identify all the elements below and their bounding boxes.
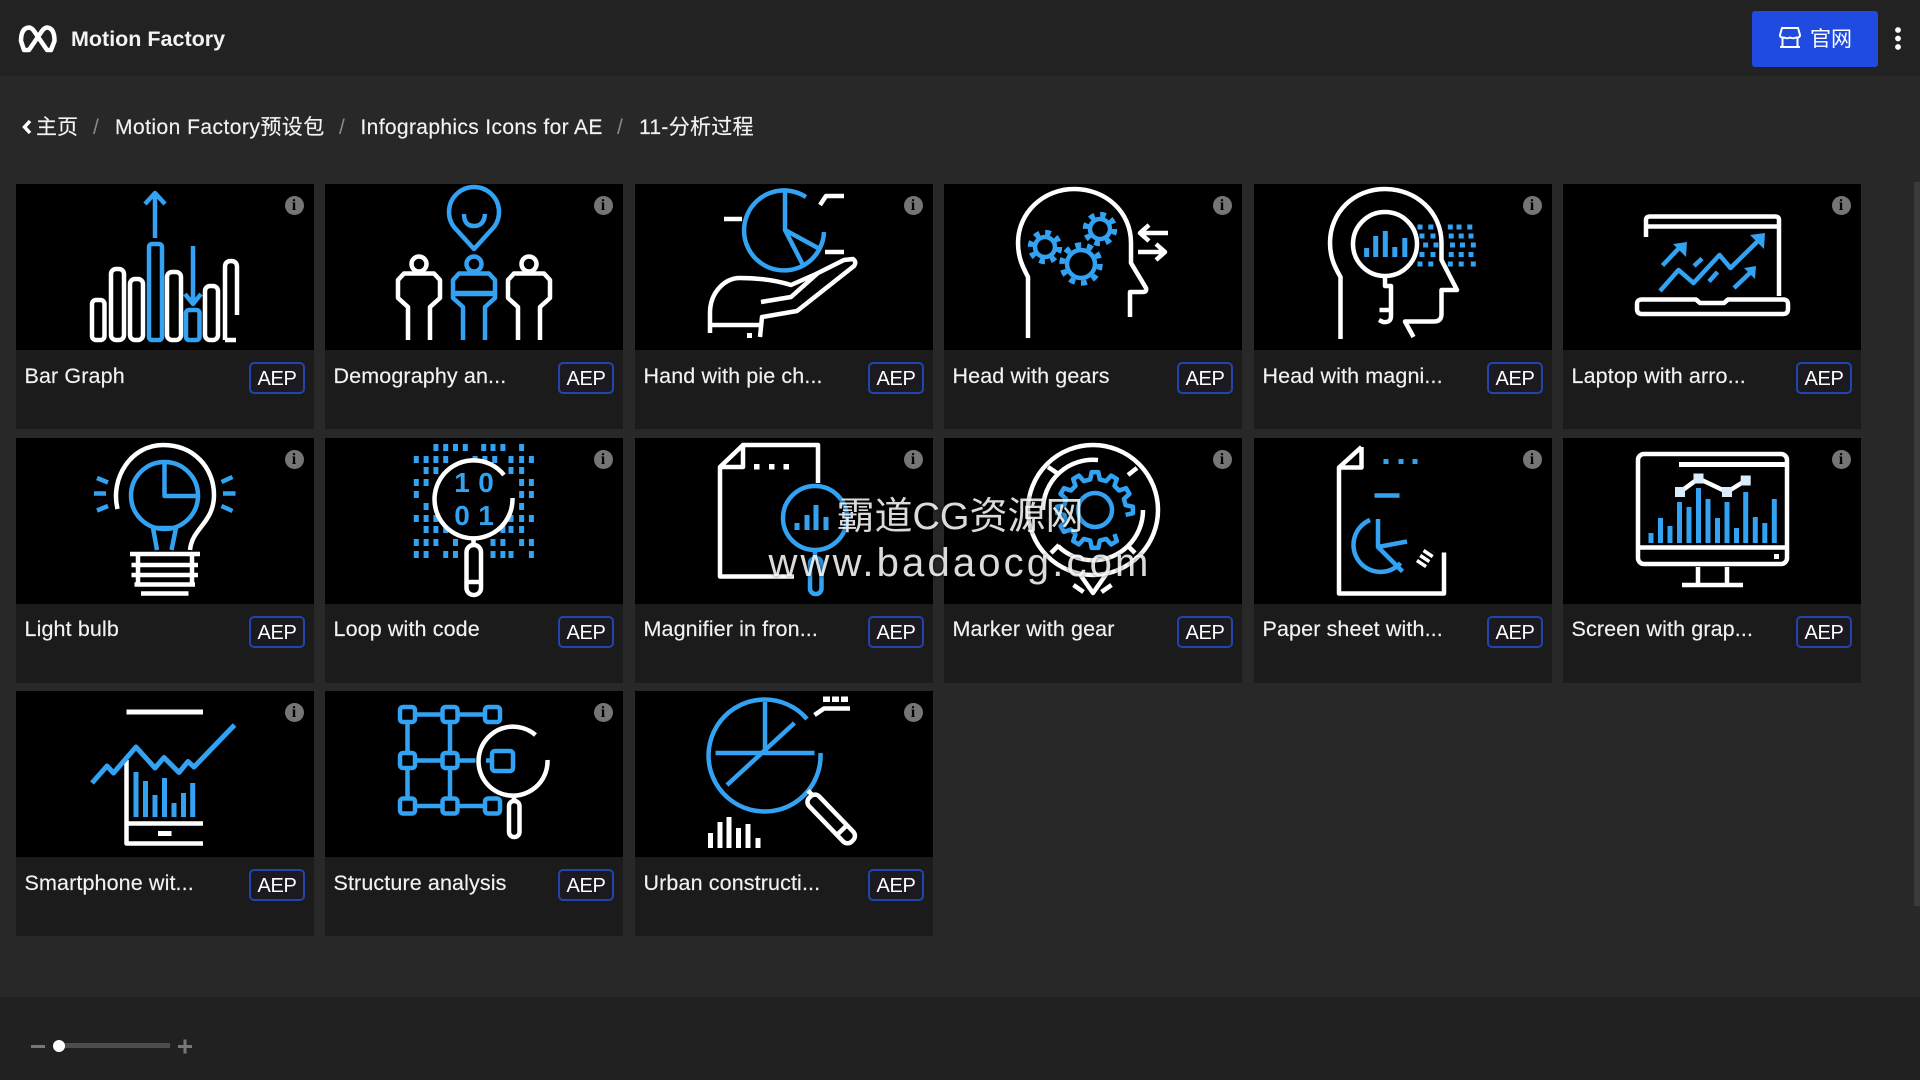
icon: laptop with arrows bbox=[1634, 214, 1790, 316]
info icon bbox=[904, 702, 922, 722]
separator: / bbox=[93, 116, 99, 139]
icon: bar graph bbox=[90, 190, 240, 342]
AEP badge: AEP bbox=[257, 368, 297, 390]
icon: marker with gear bbox=[1026, 442, 1160, 596]
panel: card Head with gears bbox=[944, 184, 1242, 429]
info icon bbox=[594, 702, 612, 722]
AEP badge: AEP bbox=[876, 875, 916, 897]
AEP badge bbox=[868, 616, 924, 648]
card title: Paper sheet with... bbox=[1262, 617, 1443, 641]
info icon bbox=[284, 702, 304, 722]
thumbnail bbox=[1563, 184, 1861, 350]
AEP badge bbox=[558, 362, 614, 394]
AEP badge bbox=[1796, 362, 1852, 394]
watermark line 1: 霸道CG资源网 bbox=[836, 496, 1084, 538]
info icon bbox=[1212, 196, 1232, 214]
card title: Head with magni... bbox=[1262, 364, 1443, 388]
info icon: i bbox=[911, 450, 915, 468]
AEP badge: AEP bbox=[257, 875, 297, 897]
card title: Head with gears bbox=[952, 364, 1110, 388]
AEP badge: AEP bbox=[876, 368, 916, 390]
icon: more menu bbox=[1895, 27, 1901, 50]
thumbnail bbox=[944, 184, 1242, 350]
info icon: i bbox=[1839, 450, 1843, 468]
info icon bbox=[594, 196, 612, 214]
AEP badge: AEP bbox=[1804, 368, 1844, 390]
info icon: i bbox=[1220, 196, 1224, 214]
card title: Marker with gear bbox=[952, 617, 1115, 641]
AEP badge: AEP bbox=[566, 368, 606, 390]
icon: urban construction analysis bbox=[706, 696, 858, 848]
info icon bbox=[1212, 450, 1232, 468]
thumbnail bbox=[1254, 184, 1552, 350]
official site button bbox=[1752, 11, 1878, 67]
panel: card Laptop with arrows bbox=[1563, 184, 1861, 429]
crumb: current page: 11-分析过程 bbox=[639, 116, 754, 139]
info icon bbox=[594, 450, 612, 468]
thumbnail bbox=[16, 691, 314, 857]
crumb: preset pack: Motion Factory预设包 bbox=[115, 116, 325, 139]
panel: card Bar Graph bbox=[16, 184, 314, 429]
brand name: Motion Factory bbox=[71, 27, 225, 51]
AEP badge bbox=[558, 869, 614, 901]
icon: structure analysis bbox=[398, 704, 550, 840]
panel: card Marker with gear bbox=[944, 438, 1242, 683]
icon: loop with code: 1 bbox=[478, 500, 494, 531]
header bar bbox=[0, 0, 1920, 76]
icon: Motion Factory logo bbox=[18, 25, 57, 52]
AEP badge: AEP bbox=[1495, 368, 1535, 390]
thumbnail bbox=[16, 438, 314, 604]
AEP badge bbox=[249, 869, 305, 901]
thumbnail bbox=[325, 438, 623, 604]
card title: Loop with code bbox=[334, 617, 480, 641]
breadcrumb bbox=[22, 116, 754, 139]
crumb: infographics: Infographics Icons for AE bbox=[360, 116, 603, 139]
thumbnail bbox=[16, 184, 314, 350]
card title: Urban constructi... bbox=[644, 871, 820, 895]
icon: store bbox=[1779, 27, 1801, 48]
info icon bbox=[284, 196, 304, 214]
thumbnail bbox=[325, 691, 623, 857]
icon: screen with graph bbox=[1636, 452, 1790, 588]
AEP badge: AEP bbox=[566, 622, 606, 644]
thumbnail bbox=[1563, 438, 1861, 604]
info icon: i bbox=[292, 704, 296, 720]
icon: loop with code: 1 bbox=[454, 467, 470, 498]
icon: magnifier in front of document bbox=[718, 442, 850, 596]
info icon: i bbox=[911, 704, 915, 720]
AEP badge bbox=[558, 616, 614, 648]
card title: Demography an... bbox=[334, 364, 506, 388]
info icon: i bbox=[1220, 450, 1224, 468]
icon: loop with code bbox=[414, 444, 534, 598]
panel: card Light bulb bbox=[16, 438, 314, 683]
info icon bbox=[1832, 450, 1850, 468]
panel: card Hand with pie chart bbox=[635, 184, 933, 429]
zoom slider bbox=[31, 1040, 192, 1054]
scrollbar bbox=[1914, 182, 1920, 906]
info icon: i bbox=[1530, 196, 1534, 214]
info icon bbox=[284, 450, 304, 468]
card title: Magnifier in fron... bbox=[644, 617, 818, 641]
card title: Hand with pie ch... bbox=[644, 364, 823, 388]
card title: Laptop with arro... bbox=[1572, 364, 1746, 388]
AEP badge bbox=[1796, 616, 1852, 648]
panel: card Head with magnifier bbox=[1254, 184, 1552, 429]
info icon bbox=[1522, 450, 1542, 468]
icon: head with magnifier bbox=[1328, 186, 1476, 339]
info icon bbox=[904, 196, 922, 214]
info icon: i bbox=[292, 450, 296, 468]
watermark line 2: www.badaocg.com bbox=[768, 541, 1151, 585]
info icon bbox=[904, 450, 922, 468]
separator: / bbox=[617, 116, 623, 139]
thumbnail bbox=[944, 438, 1242, 604]
AEP badge bbox=[1487, 362, 1543, 394]
AEP badge bbox=[1177, 362, 1233, 394]
AEP badge: AEP bbox=[1185, 622, 1225, 644]
info icon: i bbox=[601, 450, 605, 468]
icon: paper sheet with chart bbox=[1336, 445, 1446, 596]
AEP badge: AEP bbox=[566, 875, 606, 897]
thumbnail bbox=[325, 184, 623, 350]
thumbnail bbox=[635, 438, 933, 604]
panel: card Loop with code bbox=[325, 438, 623, 683]
AEP badge: AEP bbox=[1495, 622, 1535, 644]
button label: 官网 bbox=[1810, 28, 1852, 51]
thumbnail bbox=[635, 184, 933, 350]
info icon bbox=[1522, 196, 1542, 214]
thumbnail bbox=[635, 691, 933, 857]
icon: demography bbox=[396, 184, 552, 340]
panel: card Magnifier in front bbox=[635, 438, 933, 683]
panel: card Paper sheet bbox=[1254, 438, 1552, 683]
panel: card Screen with graph bbox=[1563, 438, 1861, 683]
AEP badge bbox=[868, 362, 924, 394]
thumbnail bbox=[1254, 438, 1552, 604]
card title: Screen with grap... bbox=[1572, 617, 1753, 641]
AEP badge bbox=[868, 869, 924, 901]
AEP badge bbox=[249, 616, 305, 648]
info icon: i bbox=[1839, 196, 1843, 214]
separator: / bbox=[339, 116, 345, 139]
icon: loop with code: 0 bbox=[478, 467, 494, 498]
card title: Structure analysis bbox=[334, 871, 507, 895]
icon: light bulb bbox=[94, 442, 236, 596]
panel: card Smartphone bbox=[16, 691, 314, 936]
icon: head with gears bbox=[1016, 186, 1168, 338]
info icon: i bbox=[601, 196, 605, 214]
card title: Smartphone wit... bbox=[24, 871, 194, 895]
panel: card Urban construction bbox=[635, 691, 933, 936]
AEP badge: AEP bbox=[876, 622, 916, 644]
info icon: i bbox=[911, 196, 915, 214]
AEP badge: AEP bbox=[1804, 622, 1844, 644]
info icon: i bbox=[292, 196, 296, 214]
AEP badge: AEP bbox=[257, 622, 297, 644]
info icon bbox=[1832, 196, 1850, 214]
footer bar bbox=[0, 997, 1920, 1080]
info icon: i bbox=[601, 704, 605, 720]
card title: Light bulb bbox=[24, 617, 119, 641]
info icon: i bbox=[1530, 450, 1534, 468]
icon: loop with code: 0 bbox=[454, 500, 470, 531]
AEP badge bbox=[1487, 616, 1543, 648]
icon: smartphone with chart bbox=[90, 710, 236, 846]
crumb: home: 主页 bbox=[36, 116, 78, 139]
panel: card Demography bbox=[325, 184, 623, 429]
AEP badge bbox=[1177, 616, 1233, 648]
AEP badge: AEP bbox=[1185, 368, 1225, 390]
icon: hand with pie chart bbox=[708, 188, 858, 338]
card title: Bar Graph bbox=[24, 364, 125, 388]
AEP badge bbox=[249, 362, 305, 394]
icon: back chevron bbox=[22, 120, 32, 134]
panel: card Structure analysis bbox=[325, 691, 623, 936]
